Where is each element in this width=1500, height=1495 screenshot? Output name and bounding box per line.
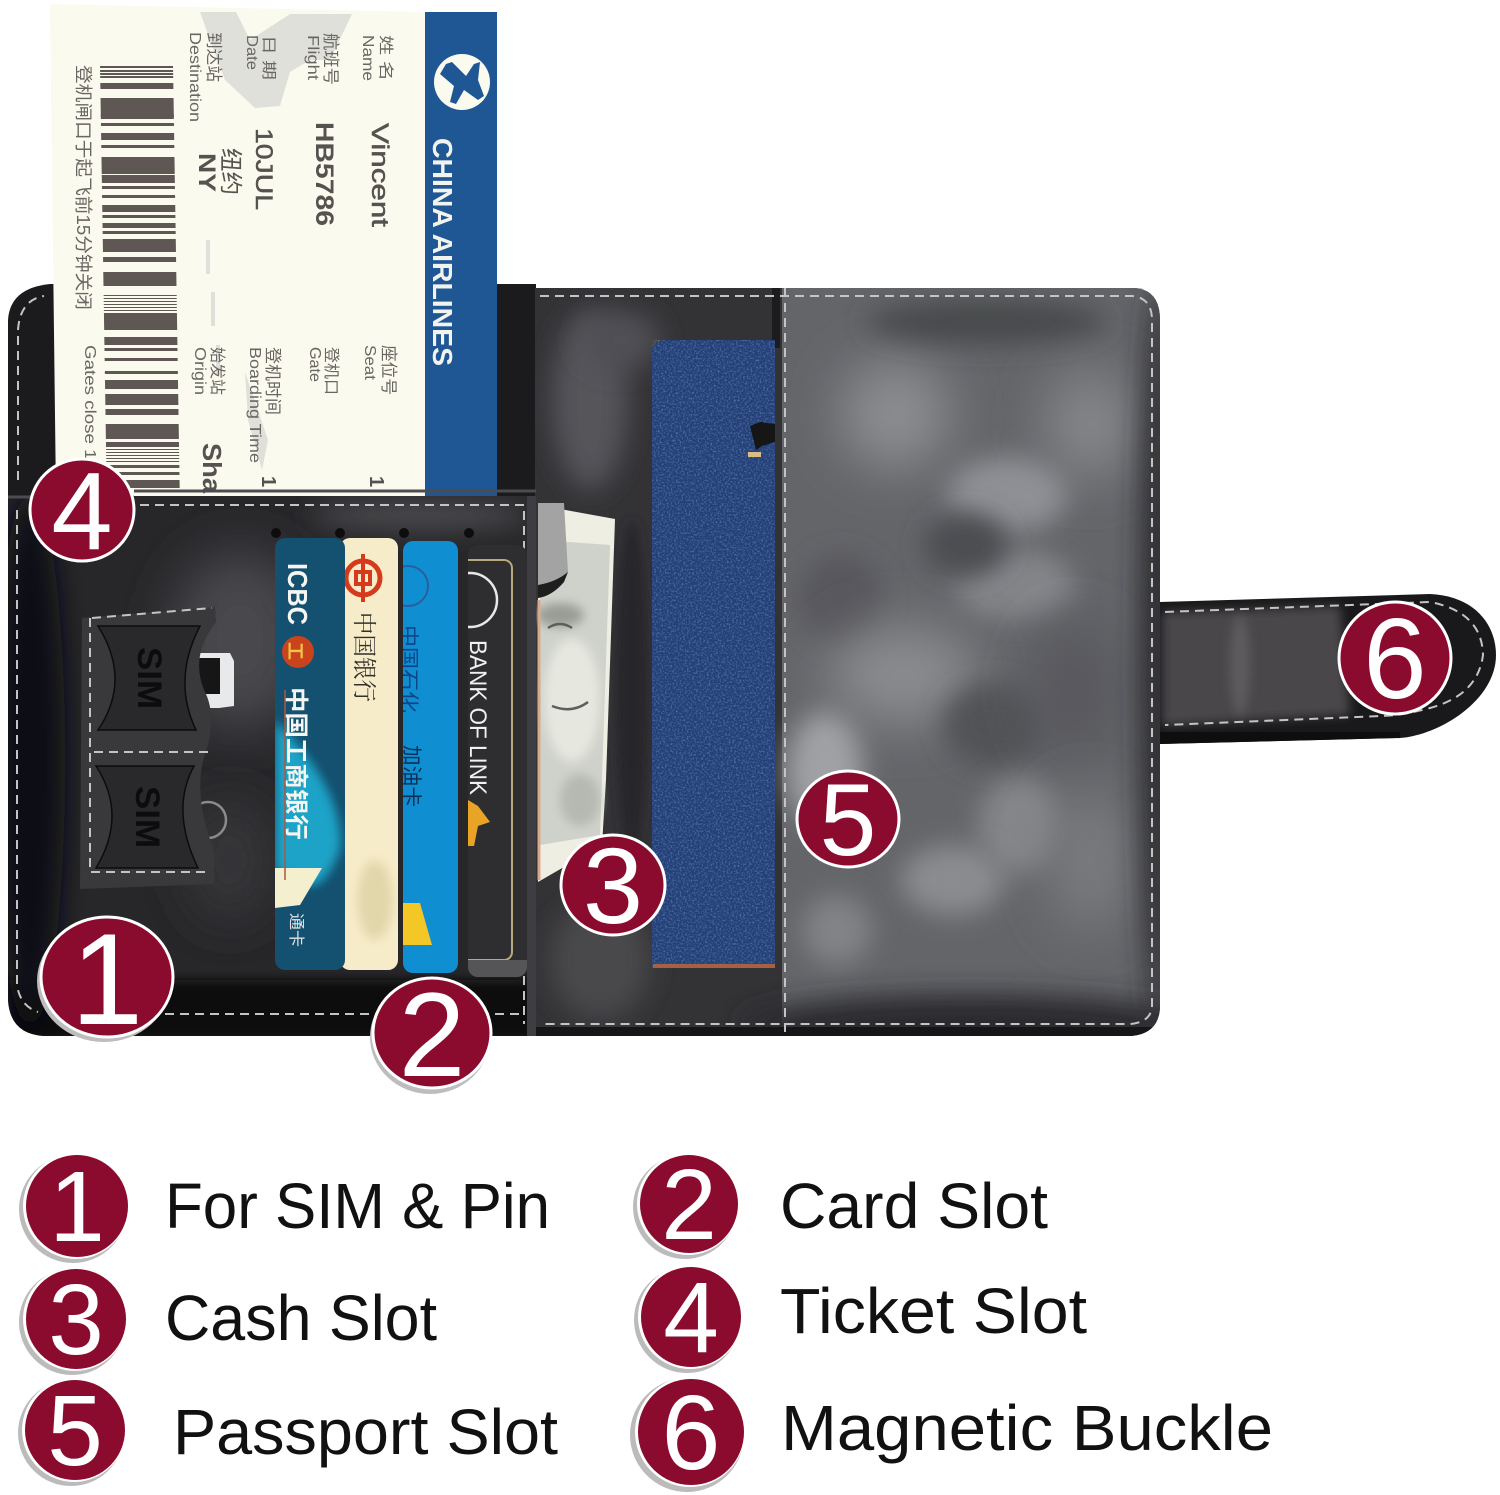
ticket fields: Name (359, 35, 376, 81)
ticket values: Vincent (366, 123, 393, 227)
ticket fields: 登机闸口于起飞前15分钟关闭 (73, 65, 93, 310)
card slot punch holes (271, 528, 474, 538)
card: ICBC: 工 (285, 642, 305, 660)
passport gold emblem (748, 422, 775, 457)
SIM slot upper: SIM (130, 647, 168, 709)
badge 1 (37, 906, 173, 1052)
card: cream Bank of China: 中国银行 (349, 612, 384, 702)
legend item 4: Ticket Slot (634, 1262, 1087, 1374)
portrait on banknote (536, 540, 610, 845)
card: cream Bank of China (340, 538, 398, 970)
legend item 6: Magnetic Buckle: Magnetic Buckle (781, 1392, 1273, 1464)
legend item 2: Card Slot: Card Slot (780, 1170, 1048, 1242)
ticket fields: 日 期 (260, 35, 277, 80)
ticket values: NY (193, 153, 220, 192)
SIM pin ring (190, 802, 226, 838)
banknote in cash slot (536, 503, 615, 882)
badge 6 (1339, 596, 1451, 723)
SIM card (194, 653, 234, 708)
card: ICBC: 中国工商银行 (282, 687, 309, 840)
badge 4: 4 (51, 450, 113, 573)
SIM slot lower: SIM (128, 786, 166, 848)
barcode (100, 66, 180, 488)
legend item 5: Passport Slot: 5 (47, 1375, 103, 1487)
ticket fields: Flight (304, 35, 321, 81)
badge 3 (561, 825, 665, 946)
badge 5: 5 (820, 763, 876, 877)
wallet back: left panel behind ticket (8, 284, 536, 500)
legend item 1: For SIM & Pin: 1 (49, 1151, 105, 1263)
legend item 1: For SIM & Pin (19, 1151, 550, 1263)
card: ICBC: ICBC (282, 563, 313, 625)
badge 2: 2 (399, 968, 465, 1102)
ticket values: 纽约 (218, 148, 244, 195)
band around note (538, 503, 568, 594)
airline name: CHINA AIRLINES (427, 138, 458, 366)
left panel top stitching (18, 296, 44, 480)
ticket fields: 航班号 (321, 33, 340, 85)
card: blue fuel card: 加油卡 (400, 745, 423, 807)
panel: wallet inner gutter and right pocket (535, 280, 1200, 1054)
ticket values: 10JUL (250, 128, 277, 210)
ticket slot edge (8, 491, 536, 497)
passport page edge (653, 964, 775, 968)
ticket fields: Boarding Time (246, 347, 263, 463)
ticket values (193, 122, 393, 494)
SIM and pin holder (80, 607, 234, 889)
ticket values: Sha (197, 443, 227, 494)
holder patch (80, 607, 216, 889)
legend item 4: Ticket Slot: Ticket Slot (780, 1275, 1087, 1347)
ticket fields (73, 32, 398, 470)
legend item 3: Cash Slot (19, 1264, 437, 1376)
legend item 3: Cash Slot: 3 (48, 1264, 104, 1376)
badge 4 (30, 450, 134, 573)
ticket fields: Seat (361, 345, 378, 381)
legend item 6: Magnetic Buckle: 6 (662, 1374, 720, 1492)
card: black bank of link (468, 546, 527, 977)
ticket fields: Gates close 15 (81, 345, 98, 470)
ticket fields: 始发站 (208, 347, 226, 395)
ticket fields: 到达站 (204, 32, 223, 82)
SIM slot upper (98, 626, 200, 730)
ticket values: HB5786 (310, 122, 338, 226)
badge 2 (370, 968, 491, 1102)
strap with magnetic buckle (1155, 590, 1500, 750)
ticket fields: 登机时间 (263, 347, 282, 415)
passport (652, 340, 775, 968)
legend item 2: Card Slot (633, 1149, 1048, 1261)
card: blue fuel card: 中国石化 (397, 625, 420, 713)
passport cover speckle (652, 340, 775, 968)
ticket values: 1 (257, 476, 279, 487)
badge 1: 1 (71, 906, 143, 1052)
card: ICBC: 通卡 (287, 913, 305, 947)
legend item 3: Cash Slot: Cash Slot (165, 1282, 437, 1354)
card: blue fuel card (403, 541, 458, 973)
legend item 5: Passport Slot: Passport Slot (173, 1396, 558, 1468)
SIM slot lower (96, 766, 198, 868)
legend item 2: Card Slot: 2 (661, 1149, 717, 1261)
banknote edge (538, 600, 540, 880)
ticket values: 1 (365, 476, 387, 487)
ticket fields: Destination (186, 32, 203, 122)
ticket paper (50, 4, 425, 498)
ticket fields: Gate (306, 347, 323, 382)
ticket map watermark (200, 12, 352, 470)
legend item 5: Passport Slot (18, 1375, 558, 1487)
legend item 6: Magnetic Buckle (630, 1374, 1273, 1492)
legend item 4: Ticket Slot: 4 (663, 1262, 719, 1374)
ticket fields: Date (243, 35, 260, 70)
ticket fields: 登机口 (322, 347, 340, 395)
badge 5 (797, 763, 899, 877)
card: black bank of link: BANK OF LINK (464, 640, 491, 795)
ticket fields: Origin (191, 347, 208, 395)
panel: front card pocket (0, 490, 538, 1040)
badge 6: 6 (1363, 596, 1427, 723)
legend (18, 1149, 1273, 1492)
ticket fields: 座位号 (379, 345, 398, 395)
card: ICBC (275, 538, 345, 970)
legend item 1: For SIM & Pin: For SIM & Pin (165, 1170, 550, 1242)
badge 3: 3 (583, 825, 643, 946)
ticket fields: 姓 名 (377, 35, 394, 81)
airline logo (434, 54, 490, 110)
blue airline stripe (425, 12, 497, 498)
boarding ticket (50, 4, 497, 498)
